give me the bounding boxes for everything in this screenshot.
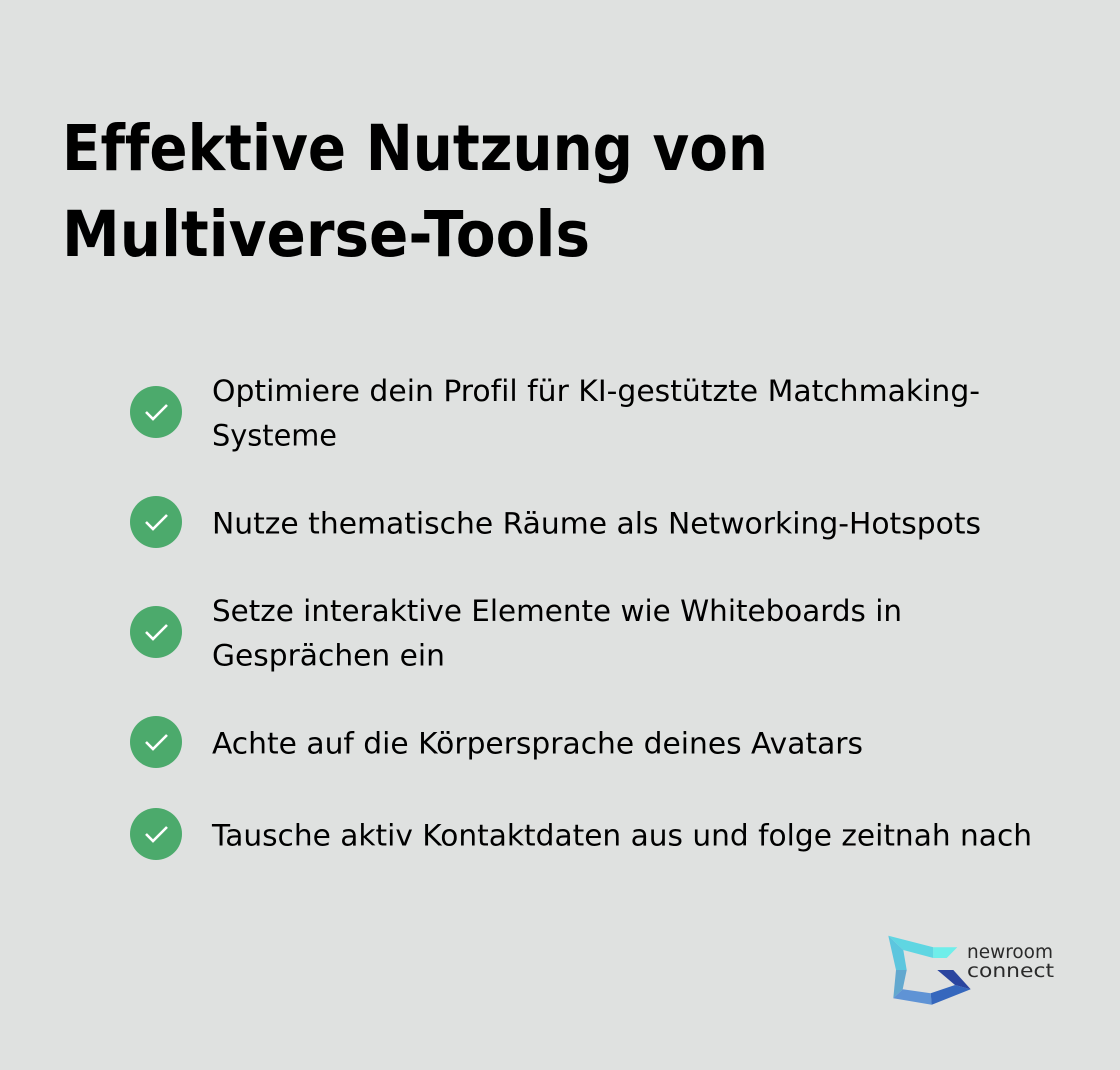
icon: check 4	[130, 716, 182, 768]
item 1	[130, 374, 980, 452]
item 3	[130, 594, 902, 672]
checklist	[130, 374, 1032, 860]
item 5	[130, 808, 1032, 860]
title	[62, 112, 768, 271]
logo text: newroom	[967, 942, 1053, 963]
icon: check 1	[130, 386, 182, 438]
item 4 text: Achte auf die Körpersprache deines Avatars	[212, 726, 863, 760]
item 4	[130, 716, 863, 768]
logo text	[967, 942, 1054, 982]
logo: newroom connect	[888, 936, 1054, 1005]
logo text: connect	[967, 961, 1054, 982]
item 1 text: Optimiere dein Profil für KI-gestützte Matchmaking-	[212, 374, 980, 408]
title: Effektive Nutzung von	[62, 112, 768, 185]
item 3 text	[212, 594, 902, 672]
logo mark	[888, 936, 971, 1005]
item 1 text: Systeme	[212, 418, 337, 452]
icon: check 5	[130, 808, 182, 860]
title: Multiverse-Tools	[62, 198, 590, 271]
item 2	[130, 496, 981, 548]
icon: check 2	[130, 496, 182, 548]
item 2 text: Nutze thematische Räume als Networking-Hotspots	[212, 506, 981, 540]
item 3 text: Gesprächen ein	[212, 638, 445, 672]
item 3 text: Setze interaktive Elemente wie Whiteboards in	[212, 594, 902, 628]
icon: check 3	[130, 606, 182, 658]
item 5 text: Tausche aktiv Kontaktdaten aus und folge zeitnah nach	[211, 818, 1032, 852]
item 1 text	[212, 374, 980, 452]
